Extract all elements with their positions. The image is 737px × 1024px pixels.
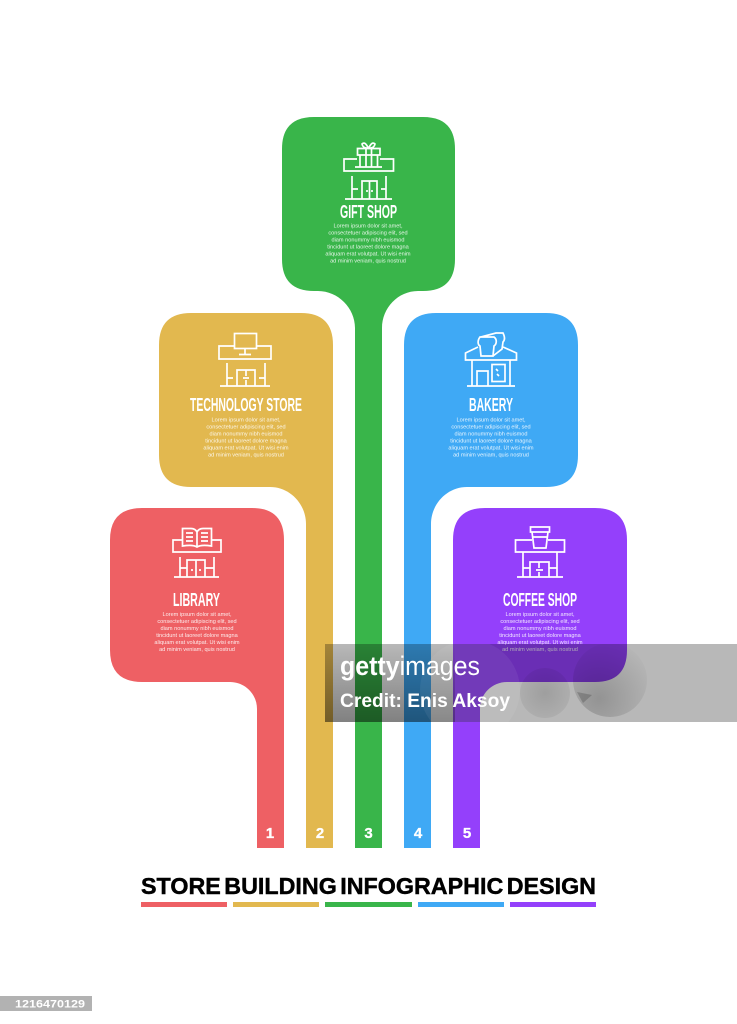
text block: coffee shop: consectetuer adipiscing elit, sed bbox=[500, 619, 580, 625]
text block: gift shop: Lorem ipsum dolor sit amet, bbox=[333, 223, 403, 229]
watermark band bbox=[325, 644, 737, 722]
text block: coffee shop: aliquam erat volutpat. Ut wisi enim bbox=[497, 640, 583, 646]
text block: technology store: diam nonummy nibh euismod bbox=[209, 431, 283, 437]
panel: bakery bbox=[404, 313, 578, 848]
icon: technology store bbox=[219, 334, 271, 386]
text block: bakery: aliquam erat volutpat. Ut wisi enim bbox=[448, 445, 534, 451]
heading: bakery: BAKERY bbox=[469, 395, 513, 415]
text block: library: tincidunt ut laoreet dolore magna bbox=[156, 633, 239, 639]
watermark credit: Credit: Enis Aksoy bbox=[340, 691, 510, 712]
text block: gift shop: aliquam erat volutpat. Ut wisi enim bbox=[325, 251, 411, 257]
panel: library bbox=[110, 508, 284, 848]
image id tag: 1216470129 bbox=[15, 998, 85, 1010]
step number 3: 3 bbox=[364, 825, 373, 842]
text block: technology store: Lorem ipsum dolor sit amet, bbox=[211, 417, 281, 423]
text block: library: diam nonummy nibh euismod bbox=[160, 626, 234, 632]
title underline bars bbox=[141, 902, 596, 907]
text block: technology store: ad minim veniam, quis nostrud bbox=[208, 452, 284, 458]
text block: bakery: tincidunt ut laoreet dolore magna bbox=[450, 438, 533, 444]
text block: gift shop: tincidunt ut laoreet dolore magna bbox=[327, 244, 410, 250]
text block: technology store: consectetuer adipiscing elit, sed bbox=[206, 424, 286, 430]
text block: bakery: ad minim veniam, quis nostrud bbox=[453, 452, 529, 458]
text block: coffee shop: ad minim veniam, quis nostrud bbox=[502, 647, 578, 653]
icon: bakery bbox=[466, 333, 516, 386]
text block: coffee shop bbox=[497, 612, 583, 653]
text block: coffee shop: tincidunt ut laoreet dolore magna bbox=[499, 633, 582, 639]
text block: gift shop: diam nonummy nibh euismod bbox=[331, 237, 405, 243]
text block: technology store bbox=[203, 417, 289, 458]
text block: library: aliquam erat volutpat. Ut wisi enim bbox=[154, 640, 240, 646]
text block: library: consectetuer adipiscing elit, sed bbox=[157, 619, 237, 625]
text block: bakery: consectetuer adipiscing elit, sed bbox=[451, 424, 531, 430]
text block: library: ad minim veniam, quis nostrud bbox=[159, 647, 235, 653]
heading: coffee shop: COFFEE SHOP bbox=[503, 590, 577, 610]
watermark logo text: gettyimages bbox=[340, 651, 480, 681]
step number 1: 1 bbox=[266, 825, 274, 842]
text block: library: Lorem ipsum dolor sit amet, bbox=[162, 612, 232, 618]
panel: gift shop bbox=[282, 117, 455, 848]
step number 2: 2 bbox=[316, 825, 324, 842]
icon: library bbox=[173, 528, 221, 577]
icon: coffee shop bbox=[516, 527, 564, 577]
text block: technology store: tincidunt ut laoreet dolore magna bbox=[205, 438, 288, 444]
panel: technology store bbox=[159, 313, 333, 848]
heading: gift shop: GIFT SHOP bbox=[340, 202, 397, 222]
step number 5: 5 bbox=[463, 825, 471, 842]
text block: bakery: diam nonummy nibh euismod bbox=[454, 431, 528, 437]
text block: bakery bbox=[448, 417, 534, 458]
step number 4: 4 bbox=[414, 825, 423, 842]
title: STORE BUILDING INFOGRAPHIC DESIGN bbox=[141, 873, 596, 899]
heading: technology store: TECHNOLOGY STORE bbox=[190, 395, 302, 415]
text block: library bbox=[154, 612, 240, 653]
text block: coffee shop: Lorem ipsum dolor sit amet, bbox=[505, 612, 575, 618]
icon: gift shop bbox=[344, 143, 394, 199]
heading: library: LIBRARY bbox=[173, 590, 220, 610]
text block: coffee shop: diam nonummy nibh euismod bbox=[503, 626, 577, 632]
panel: coffee shop bbox=[453, 508, 627, 848]
text block: gift shop: consectetuer adipiscing elit, sed bbox=[328, 230, 408, 236]
text block: technology store: aliquam erat volutpat. Ut wisi enim bbox=[203, 445, 289, 451]
text block: gift shop: ad minim veniam, quis nostrud bbox=[330, 258, 406, 264]
text block: bakery: Lorem ipsum dolor sit amet, bbox=[456, 417, 526, 423]
text block: gift shop bbox=[325, 223, 411, 264]
image id tag bbox=[0, 996, 92, 1011]
